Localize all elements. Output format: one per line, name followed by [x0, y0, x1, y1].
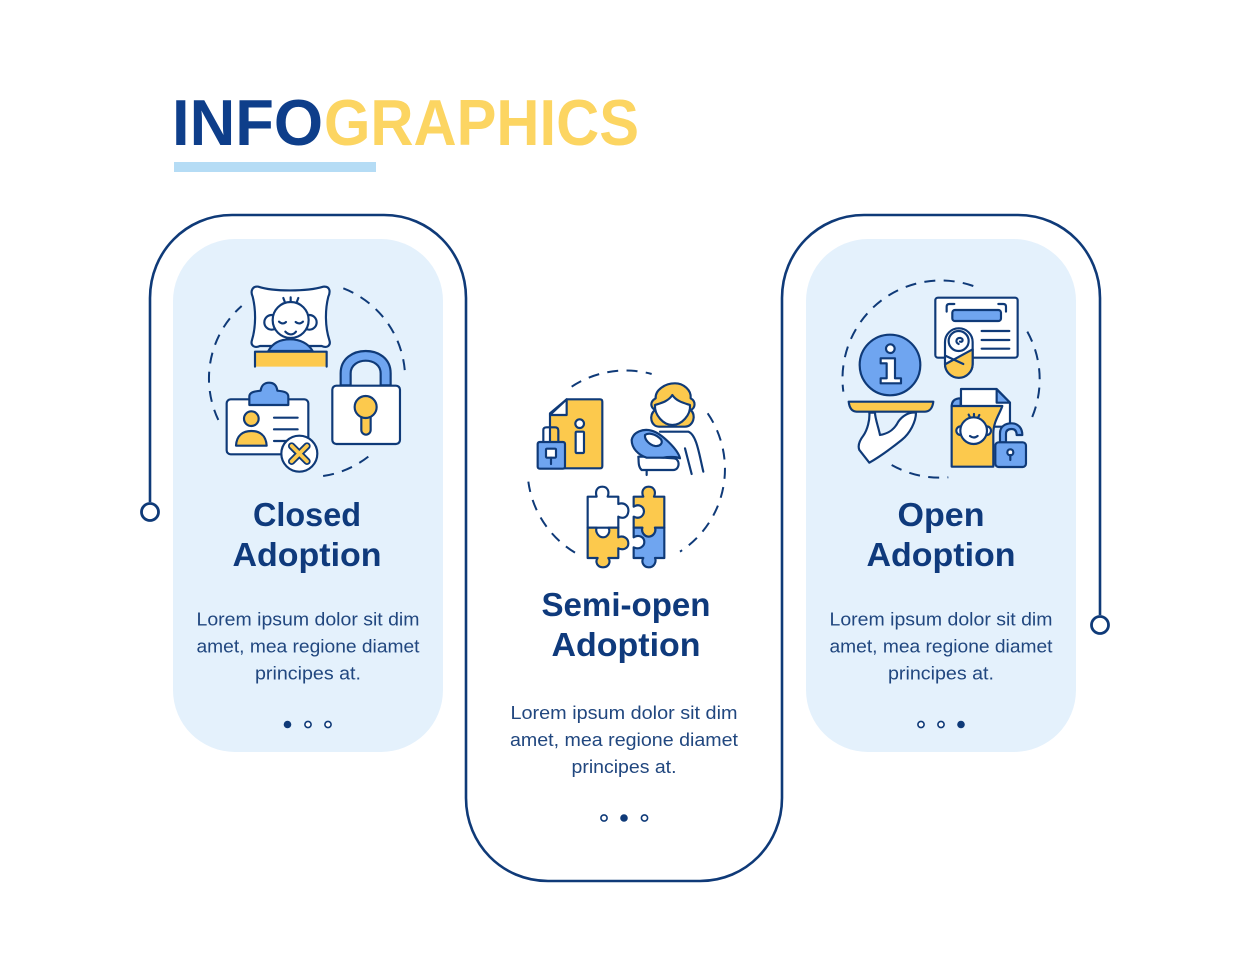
pager dots: semi-open adoption: [601, 814, 648, 822]
heading: closed adoption: Closed: [253, 496, 361, 533]
title underline: [174, 162, 376, 172]
heading: semi-open adoption: Semi-open: [542, 586, 710, 623]
heading: open adoption: Open: [898, 496, 984, 533]
body text: open adoption: [830, 610, 1052, 684]
body text: open adoption: Lorem ipsum dolor sit dim: [830, 610, 1052, 630]
body text: closed adoption: amet, mea regione diamet: [196, 636, 420, 656]
icon: closed adoption: [209, 287, 405, 477]
title: INFO: [172, 86, 323, 159]
title: GRAPHICS: [324, 86, 639, 159]
body text: semi-open adoption: principes at.: [572, 757, 676, 777]
icon: semi-open adoption: [528, 371, 725, 567]
panel: closed adoption: Adoption: [232, 536, 382, 573]
body text: open adoption: amet, mea regione diamet: [830, 636, 1052, 656]
body text: semi-open adoption: amet, mea regione diamet: [510, 730, 738, 750]
panel: open adoption: Adoption: [866, 536, 1016, 573]
body text: semi-open adoption: [510, 703, 738, 777]
panel: semi-open adoption: Adoption: [552, 626, 700, 663]
body text: closed adoption: [196, 610, 420, 684]
panel: open adoption: [806, 239, 1076, 752]
connecting outline: [142, 215, 1108, 881]
icon: open adoption: [842, 280, 1040, 478]
body text: closed adoption: Lorem ipsum dolor sit dim: [196, 610, 420, 630]
body text: semi-open adoption: Lorem ipsum dolor sit dim: [510, 703, 738, 723]
title: [172, 86, 639, 159]
body text: open adoption: principes at.: [888, 664, 994, 684]
pager dots: open adoption: [918, 721, 965, 728]
panel: semi-open adoption: [510, 371, 738, 822]
panel: closed adoption: [173, 239, 443, 752]
body text: closed adoption: principes at.: [255, 664, 361, 684]
pager dots: closed adoption: [284, 721, 331, 728]
